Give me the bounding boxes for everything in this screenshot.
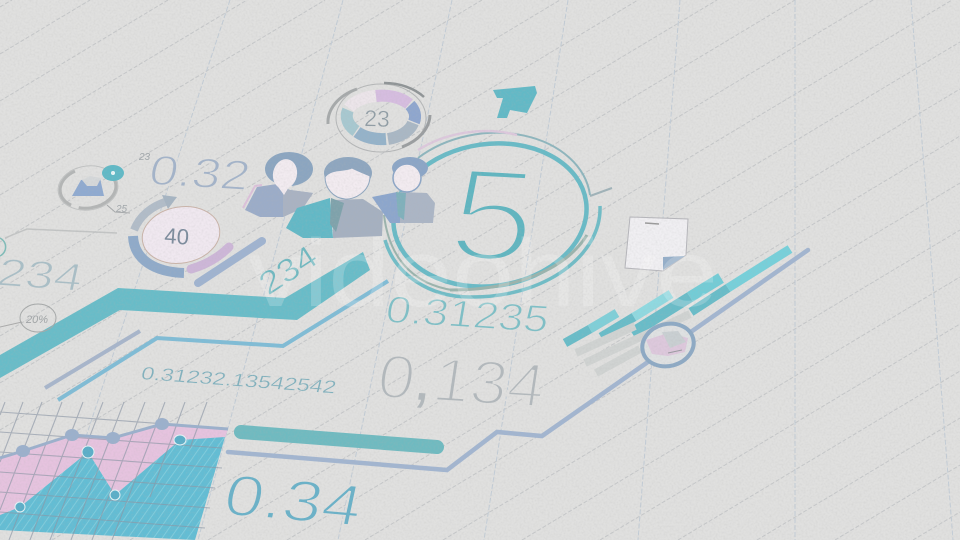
gray-blue short line: [45, 331, 140, 388]
big ring with number 5: [384, 131, 612, 299]
value 0.31232.13542542: 0.31232.13542542: [139, 363, 338, 397]
bar row 4: [691, 288, 728, 312]
watermark: videohive: [248, 220, 718, 327]
value 234 rotated: 234: [252, 238, 324, 302]
value 0.34: 0.34: [218, 463, 368, 539]
40 gauge: [133, 195, 262, 283]
stacked bars: [565, 249, 790, 373]
people icons: [243, 152, 435, 238]
teal rounded bar: [241, 432, 437, 447]
envelope: [72, 178, 104, 196]
value 0.32: 0.32: [145, 147, 254, 199]
person: center man: [286, 157, 383, 238]
teal dot: [102, 165, 124, 181]
chart nodes: [16, 418, 169, 457]
numeral 5: 5: [442, 140, 545, 291]
handshake badge: [637, 318, 699, 372]
person: woman: [243, 152, 313, 217]
donut 23: 23: [364, 105, 390, 132]
label 25: 25: [115, 204, 128, 215]
teal area: [0, 437, 225, 540]
bar row 1: [565, 329, 590, 343]
40 gauge: 40: [164, 223, 190, 250]
teal zigzag band: [0, 252, 370, 378]
person: right man: [372, 157, 435, 223]
label 23: 23: [138, 152, 151, 163]
value 0,134: 0,134: [373, 343, 550, 421]
callout line and 20% badge: [0, 229, 117, 332]
arrow icon: [493, 86, 537, 118]
gray bars: [576, 326, 635, 353]
bar row 3: [632, 297, 690, 333]
area chart: [0, 402, 228, 540]
envelope icon badge: [55, 152, 151, 215]
paper note icon: [625, 217, 688, 271]
bar row 2: [601, 317, 634, 337]
blue data line: [0, 424, 228, 458]
pink area: [0, 424, 228, 515]
teal nodes: [15, 435, 186, 512]
long blue connector line: [228, 250, 808, 470]
callout line and 20% badge: 20%: [25, 314, 48, 326]
donut 23: [328, 83, 430, 152]
value 0.31235: 0.31235: [382, 289, 552, 341]
thin blue zigzag line: [58, 281, 388, 400]
